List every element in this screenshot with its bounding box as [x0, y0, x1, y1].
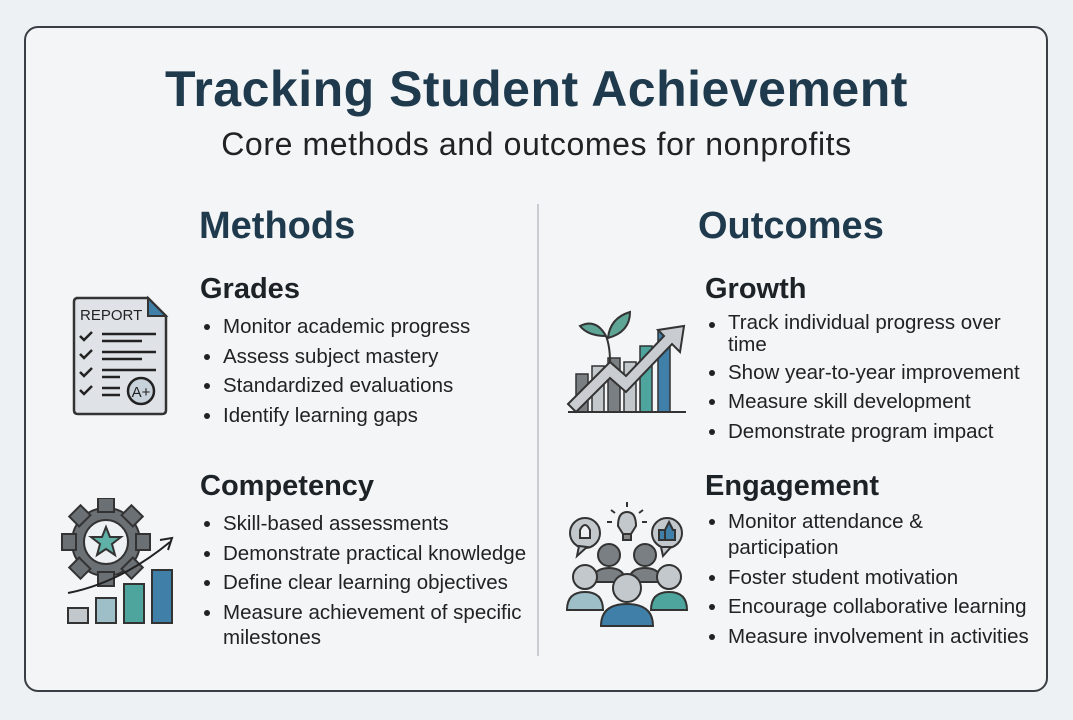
bullets: Grades: Assess subject mastery: [223, 344, 438, 368]
bullets: Engagement: participation: [728, 536, 839, 559]
bullets: Grades: Identify learning gaps: [223, 404, 418, 426]
bullets: Growth: Show year-to-year improvement: [728, 360, 1020, 384]
bullets: Engagement: Encourage collaborative learning: [728, 595, 1027, 618]
icon: report card: A+: [132, 384, 151, 401]
bullets: Competency: Measure achievement of specific: [223, 600, 522, 624]
heading: Competency: Competency: [200, 470, 374, 502]
heading: Engagement: Engagement: [705, 470, 879, 502]
section: Grades: [200, 273, 470, 426]
section: Competency: [200, 470, 526, 648]
bullets: Grades: Standardized evaluations: [223, 374, 453, 397]
bullets: Growth: time: [728, 333, 767, 356]
bullets: Competency: [204, 512, 526, 648]
icon: gear with bars: [61, 498, 174, 624]
heading: Methods: Methods: [199, 205, 355, 247]
bullets: Competency: Skill-based assessments: [223, 512, 449, 535]
icon: engaged group: [566, 502, 688, 627]
bullets: Grades: Monitor academic progress: [223, 315, 470, 338]
section: Engagement: [705, 470, 1029, 648]
section: Growth: [705, 273, 1020, 442]
bullets: Engagement: Monitor attendance &: [728, 510, 923, 533]
bullets: Engagement: [709, 510, 1029, 648]
bullets: Competency: Define clear learning objectives: [223, 571, 508, 594]
bullets: Growth: Track individual progress over: [728, 311, 1001, 334]
heading: Grades: Grades: [200, 273, 300, 305]
bullets: Engagement: Measure involvement in activities: [728, 624, 1029, 648]
bullets: Competency: milestones: [223, 626, 321, 648]
bullets: Grades: [204, 315, 470, 426]
icon: growth chart with plant: [566, 310, 686, 414]
bullets: Growth: Demonstrate program impact: [728, 420, 993, 442]
icon: report card: [72, 296, 168, 416]
bullets: Growth: Measure skill development: [728, 390, 971, 413]
heading: Outcomes: Outcomes: [698, 205, 884, 247]
icon: report card: REPORT: [80, 307, 142, 324]
subtitle: Core methods and outcomes for nonprofits: [221, 126, 852, 162]
bullets: Engagement: Foster student motivation: [728, 566, 958, 588]
heading: Growth: Growth: [705, 273, 806, 305]
bullets: Growth: [709, 311, 1020, 442]
title: Tracking Student Achievement: [165, 61, 908, 117]
bullets: Competency: Demonstrate practical knowledge: [223, 542, 526, 564]
